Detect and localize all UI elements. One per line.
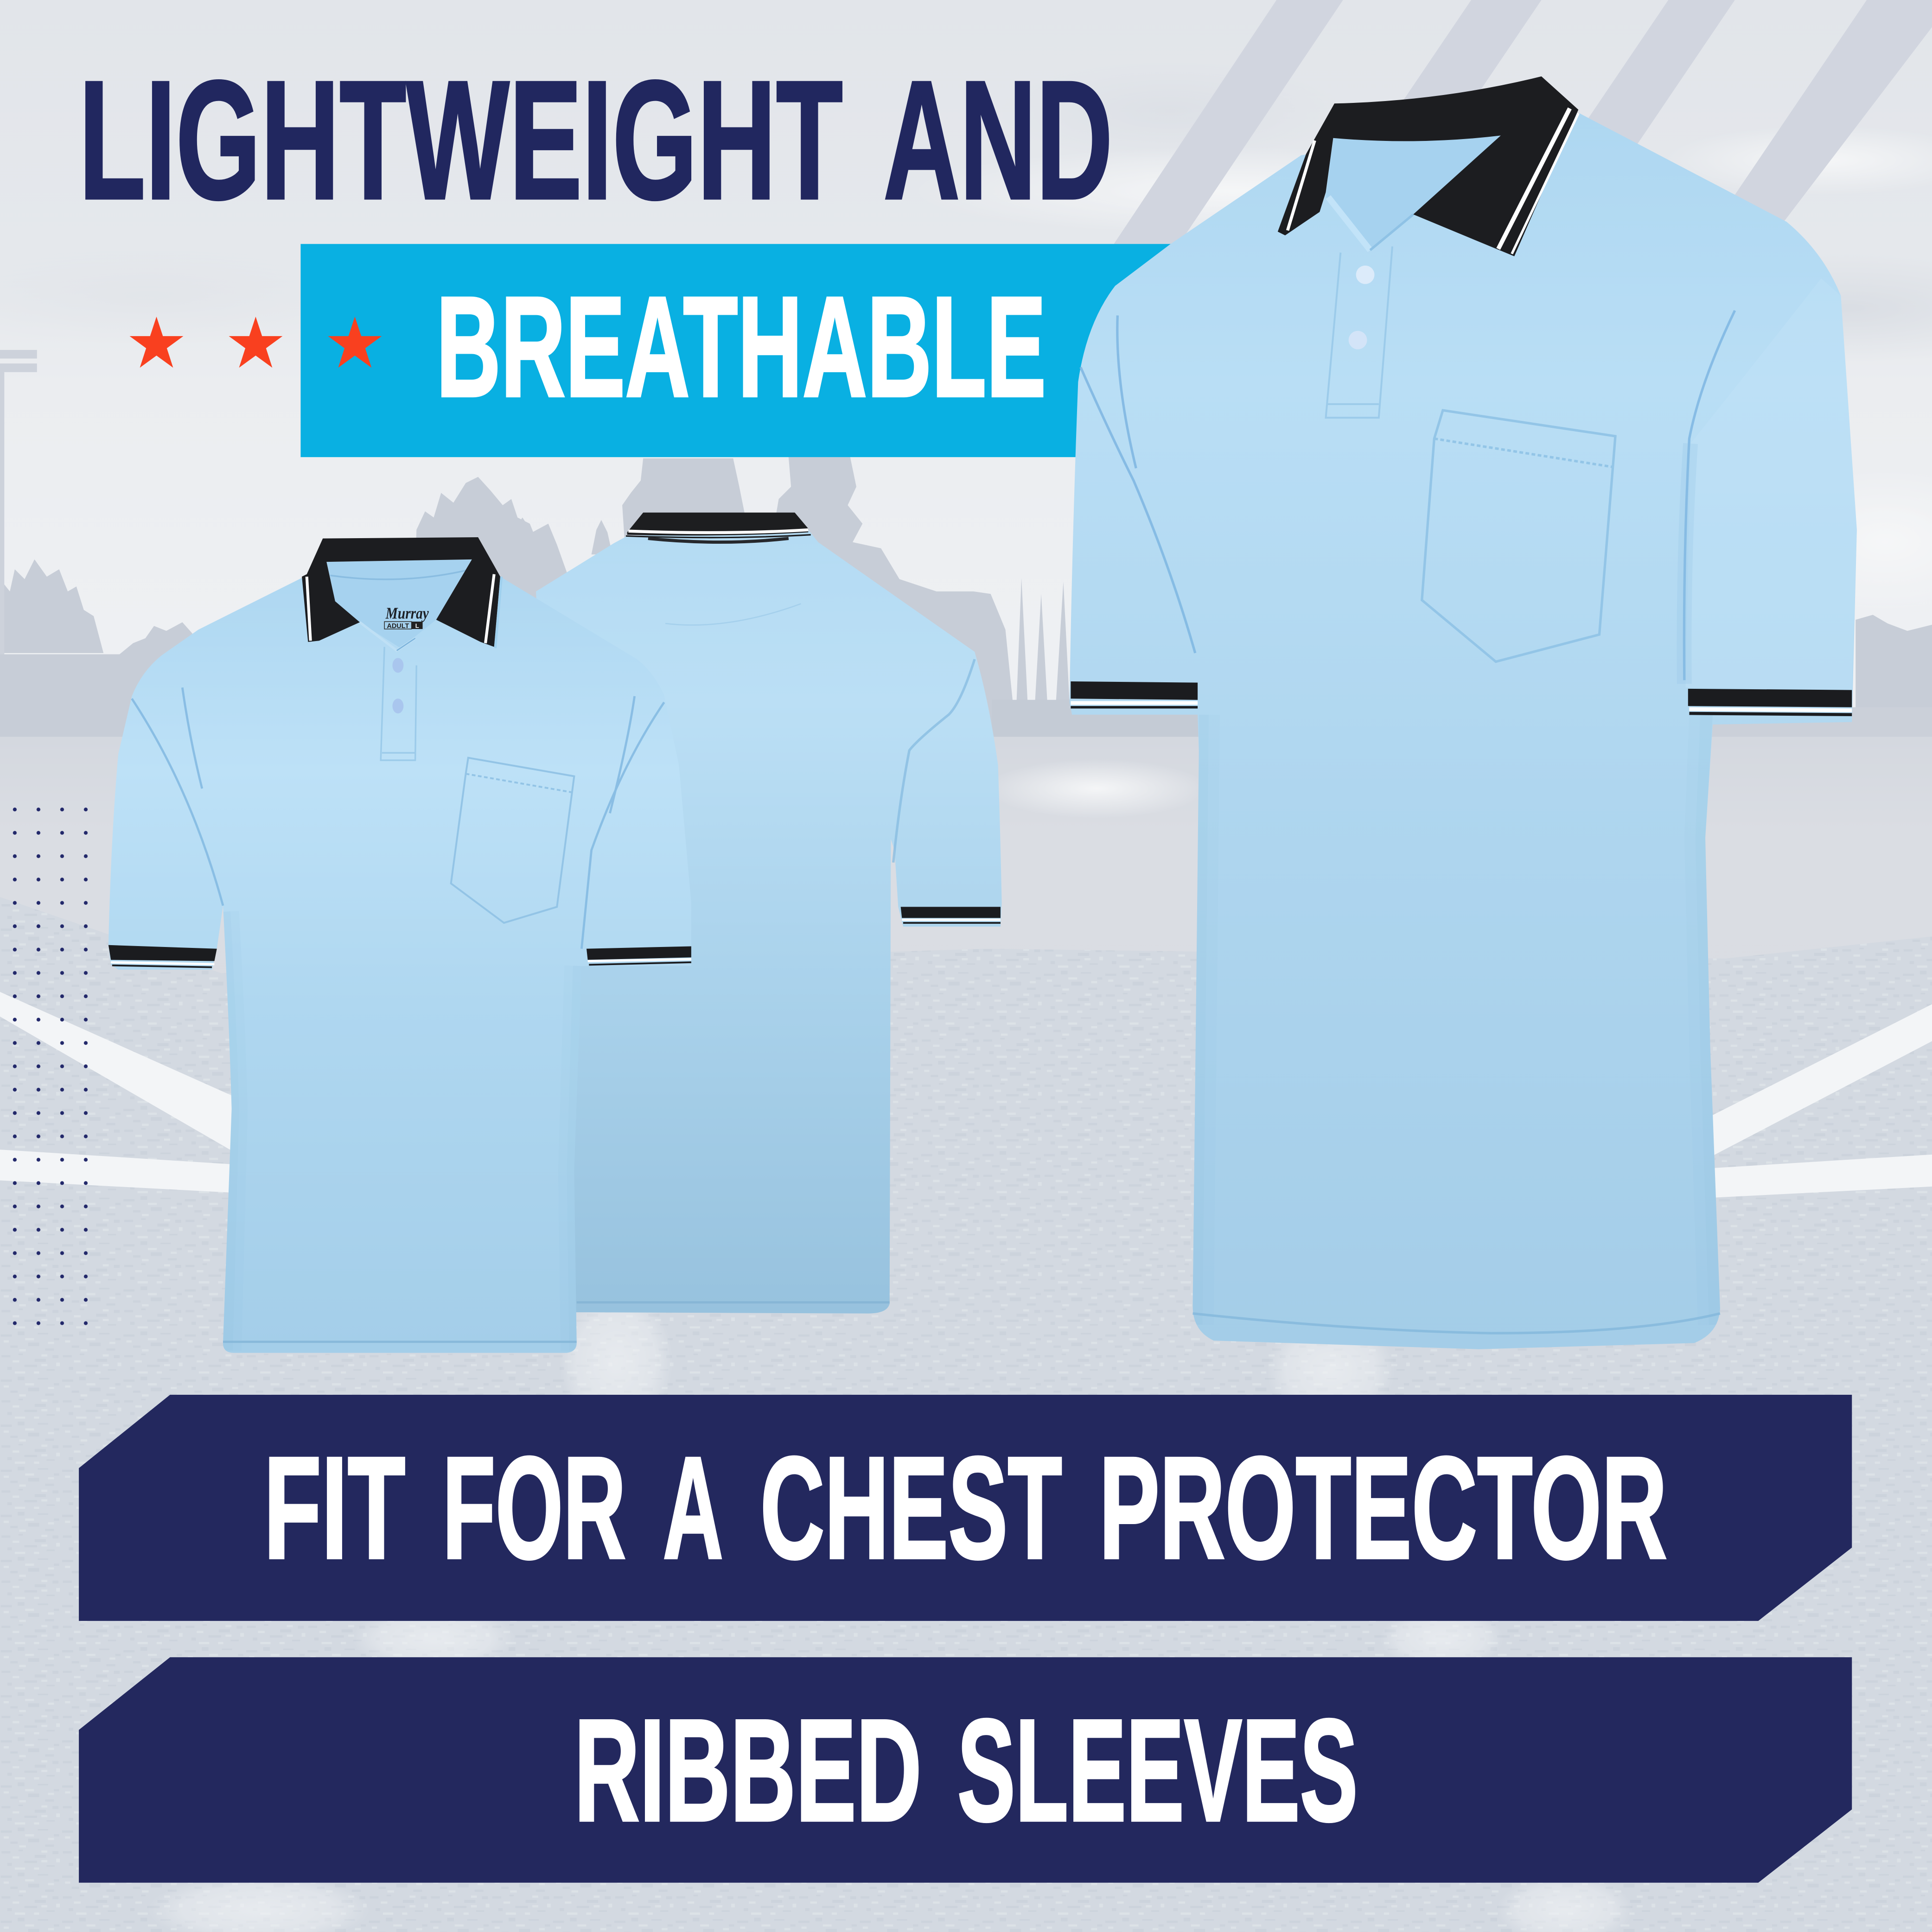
headline: lightweight and: LIGHTWEIGHT (79, 46, 843, 235)
left cuff (1071, 681, 1198, 707)
sleeve seams and folds (1081, 311, 1735, 680)
brand tag: Murray (385, 604, 429, 622)
banner text: CHEST (760, 1427, 1062, 1589)
breathable label: BREATHABLE (436, 267, 1046, 427)
body edge shading (1192, 715, 1719, 1325)
dot grid (3, 798, 97, 1335)
inner neck with label (326, 559, 472, 648)
clouds (0, 62, 1932, 616)
pocket (1422, 410, 1615, 661)
banner text: FIT (264, 1427, 405, 1589)
stars (130, 317, 382, 368)
pocket (451, 758, 574, 923)
decorative diagonal stripes (1114, 0, 1932, 244)
placket (360, 622, 416, 760)
shirt: front view (108, 537, 691, 1353)
outfield wall (0, 654, 1932, 739)
back cuff (901, 907, 1001, 923)
placket and buttons (1326, 197, 1413, 418)
body edge shading (223, 912, 580, 1350)
collar (1278, 76, 1578, 256)
inner neck with label: L (415, 622, 419, 629)
floodlight (0, 350, 37, 655)
sleeve seams (132, 687, 664, 949)
outfield grass and infield dirt (0, 737, 1932, 1932)
banner text: A (663, 1427, 723, 1589)
chalk lines (0, 992, 1932, 1198)
banner text: RIBBED (574, 1689, 922, 1851)
right cuff (1688, 689, 1852, 715)
banner text (264, 1427, 1667, 1589)
right sleeve highlight (1685, 279, 1857, 690)
back collar (626, 513, 811, 542)
headline: lightweight and: AND (883, 46, 1113, 235)
banner: ribbed sleeves (79, 1657, 1852, 1883)
shirt: back view (536, 513, 1002, 1314)
tree line (0, 457, 1932, 737)
banner: fit for a chest protector (79, 1395, 1852, 1621)
inner neck (1326, 135, 1501, 250)
collar (302, 537, 502, 648)
shirt: main large view (1070, 76, 1857, 1349)
right cuff (587, 946, 691, 965)
banner text: SLEEVES (957, 1689, 1358, 1851)
inner neck with label: ADULT (387, 623, 409, 630)
cyan banner: breathable (300, 244, 1175, 457)
banner text: FOR (442, 1427, 626, 1589)
left cuff (108, 945, 217, 967)
